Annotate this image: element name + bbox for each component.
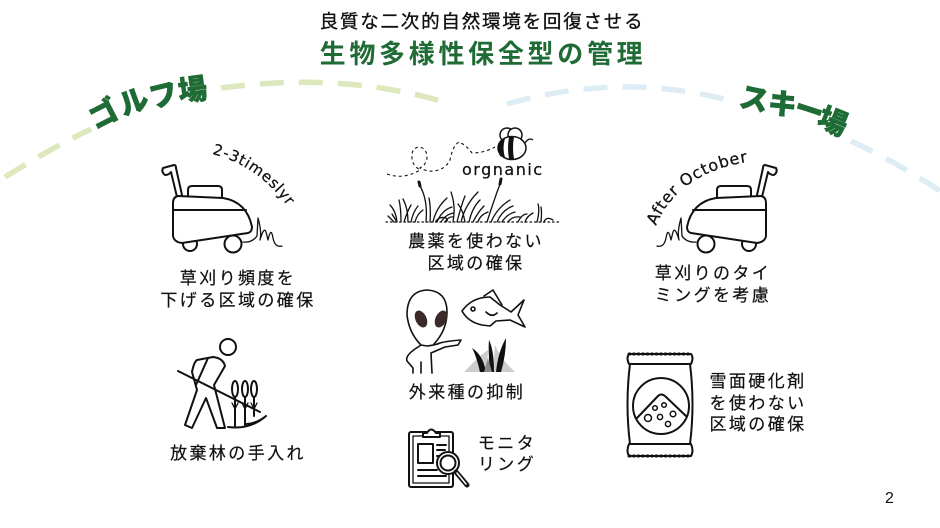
label: reduce mowing frequency bbox=[160, 269, 316, 310]
heading: ski resort bbox=[736, 82, 852, 143]
label: consider mowing timing bbox=[655, 264, 771, 305]
handwritten word: organic: orgnanic bbox=[462, 160, 544, 179]
heading: ski resort: ス bbox=[736, 82, 771, 119]
label: monitoring bbox=[478, 434, 536, 474]
icon: lawn mower right bbox=[657, 165, 777, 252]
heading: golf course: ル bbox=[115, 83, 153, 123]
label: no snow hardener zones: を使わない bbox=[710, 393, 806, 413]
heading: golf course: ゴ bbox=[83, 92, 124, 136]
subtitle: 良質な二次的自然環境を回復させる bbox=[320, 11, 644, 32]
label: no snow hardener zones bbox=[710, 372, 806, 434]
heading: ski resort: 場 bbox=[813, 101, 852, 143]
heading: golf course: 場 bbox=[176, 72, 209, 109]
label: pesticide-free zones: 区域の確保 bbox=[428, 254, 524, 273]
heading: golf course: フ bbox=[146, 77, 182, 115]
label: pesticide-free zones: 農薬を使わない bbox=[408, 231, 544, 251]
icon: fish bbox=[462, 290, 525, 327]
curved text: after October: After October bbox=[647, 153, 746, 226]
icon: person with scythe bbox=[178, 339, 266, 428]
title bbox=[320, 11, 646, 69]
heading: ski resort: キ bbox=[764, 86, 800, 125]
main heading: 生物多様性保全型の管理 bbox=[320, 39, 646, 69]
label: monitoring: リング bbox=[478, 455, 536, 474]
icon: bee with dashed flight path bbox=[387, 128, 533, 176]
blue dashed arc: ski resort bbox=[507, 87, 940, 191]
label: reduce mowing frequency: 下げる区域の確保 bbox=[160, 291, 316, 310]
label: monitoring: モニタ bbox=[478, 434, 536, 453]
green dashed arc: golf course bbox=[5, 82, 441, 177]
icon: grass bbox=[386, 179, 560, 222]
label: no snow hardener zones: 雪面硬化剤 bbox=[710, 372, 806, 391]
icon: alien bbox=[407, 290, 461, 373]
label: pesticide-free zones bbox=[408, 231, 544, 273]
icon: lawn mower left bbox=[162, 165, 282, 252]
curved text: 2-3 times per year: 2-3timeslyr bbox=[212, 144, 294, 204]
icon: clipboard with magnifier bbox=[409, 430, 467, 487]
heading: golf course bbox=[83, 72, 209, 136]
heading: ski resort: ー bbox=[790, 92, 828, 131]
label: abandoned forest care: 放棄林の手入れ bbox=[170, 444, 306, 463]
icon: snow hardener bag bbox=[628, 354, 692, 456]
label: suppress invasive species: 外来種の抑制 bbox=[409, 383, 525, 402]
label: consider mowing timing: ミングを考慮 bbox=[655, 286, 771, 305]
label: no snow hardener zones: 区域の確保 bbox=[710, 415, 806, 434]
icon: invasive grass bbox=[464, 338, 515, 372]
page number: 2 bbox=[885, 490, 894, 507]
label: reduce mowing frequency: 草刈り頻度を bbox=[180, 269, 296, 288]
label: consider mowing timing: 草刈りのタイ bbox=[655, 264, 771, 283]
